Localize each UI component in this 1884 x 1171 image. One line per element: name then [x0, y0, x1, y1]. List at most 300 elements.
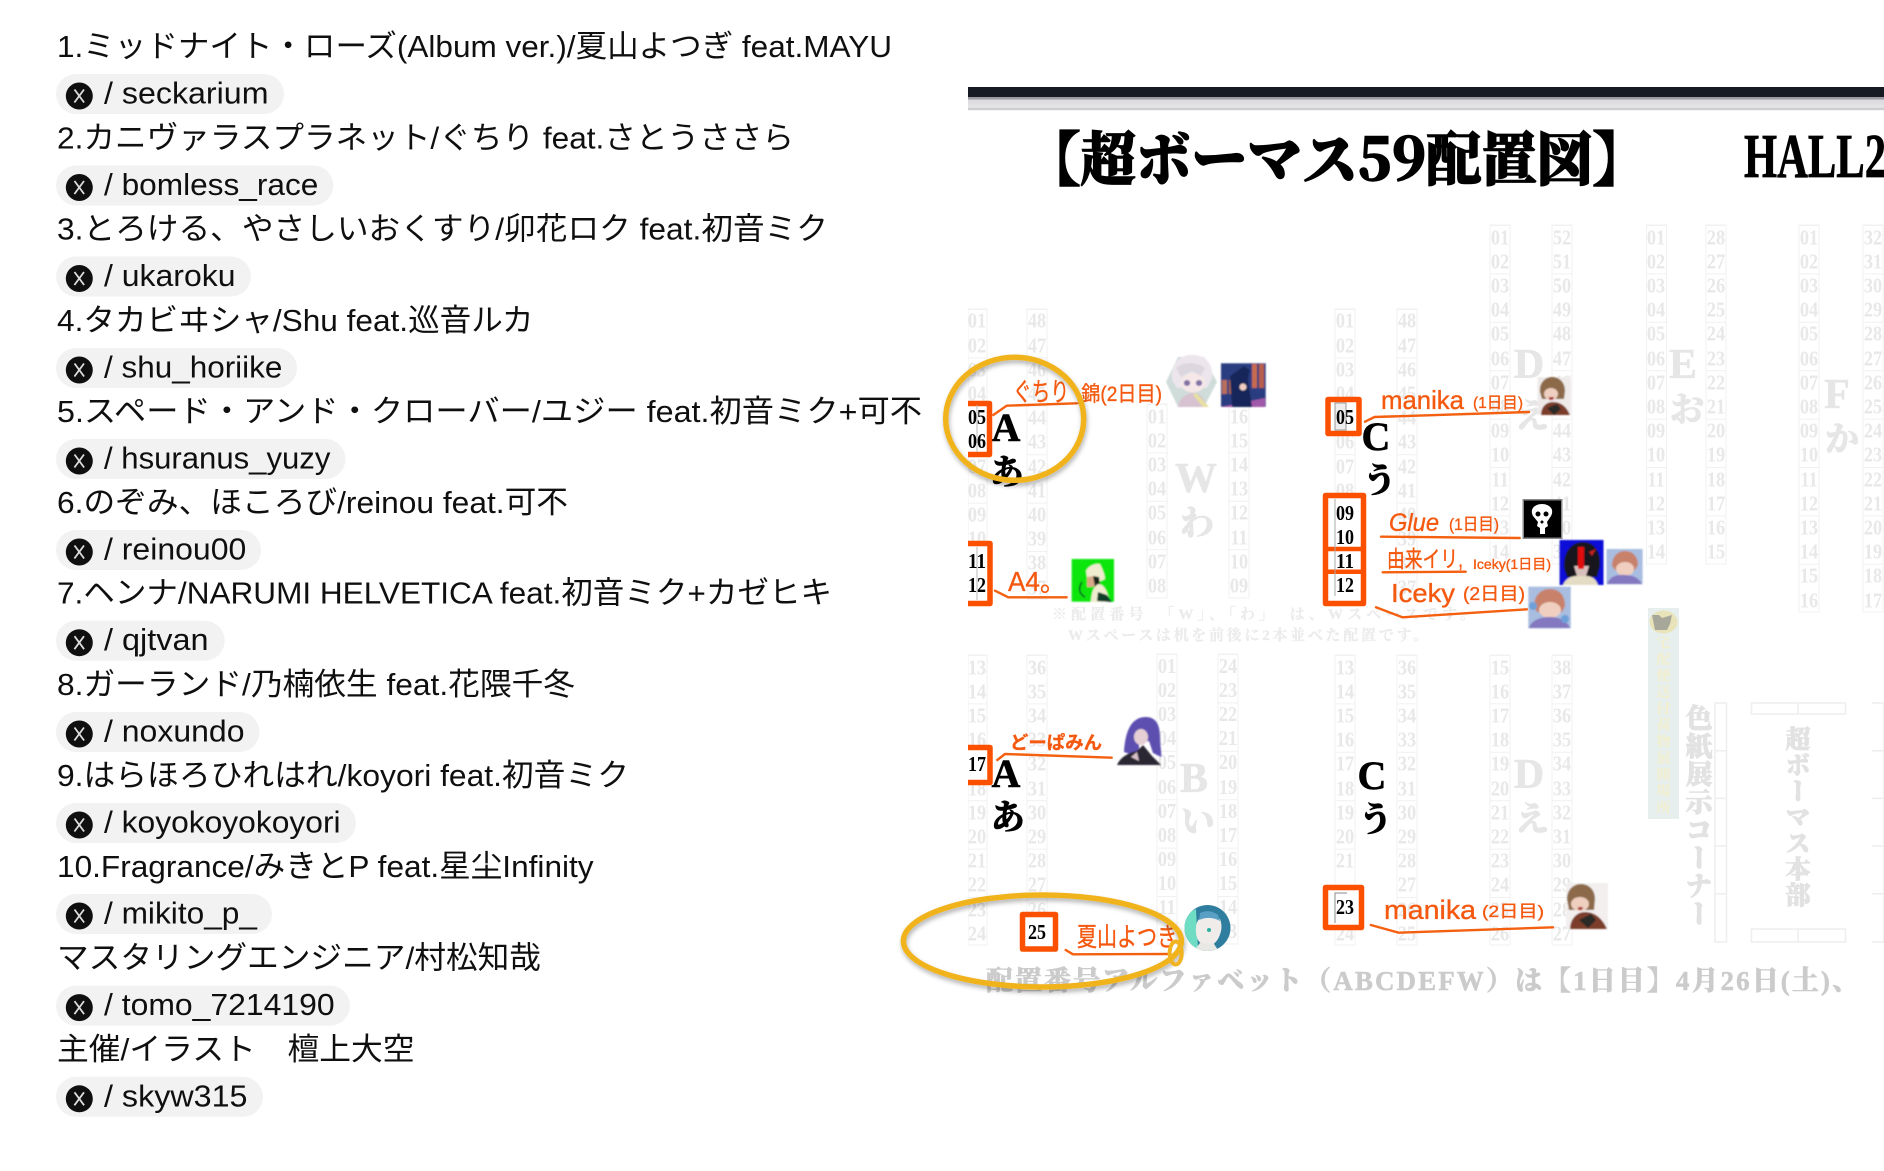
seat numbers: block F: 12 [1800, 492, 1818, 516]
seat numbers: block C upper: 44 [1398, 406, 1416, 430]
credit 4 [56, 303, 534, 388]
delivery strip [1648, 608, 1679, 819]
credit 6 [56, 485, 568, 570]
seat numbers: block D lower: 35 [1553, 728, 1571, 752]
seat numbers: block A lower: 16 [968, 728, 986, 752]
seat numbers: block A lower: 35 [1028, 680, 1046, 704]
seat numbers: block E: 20 [1707, 419, 1725, 443]
seat numbers: block W: 07 [1148, 550, 1166, 574]
credit 9: / koyokoyokoyori [104, 804, 341, 840]
seat numbers: block A lower: 28 [1028, 849, 1046, 873]
credit 7 [56, 576, 832, 661]
credit 3: 3.とろける、やさしいおくすり/卯花ロク feat.初音ミク [57, 212, 828, 246]
seat numbers: block D upper: 01 [1491, 226, 1509, 250]
label: guchiri and nishiki: ぐちり [1013, 377, 1069, 407]
seat numbers: block D lower: 18 [1491, 728, 1509, 752]
seat numbers: block B: 03 [1158, 703, 1176, 726]
faint block letters: わ [1180, 506, 1214, 543]
seat numbers: block D upper: 52 [1553, 226, 1571, 250]
seat numbers: block F: 19 [1864, 540, 1882, 564]
seat numbers: block D lower: 16 [1491, 680, 1509, 704]
seat numbers: block A upper: 02 [968, 334, 986, 358]
seat numbers: block D upper: 02 [1491, 250, 1509, 274]
seat numbers: block A upper: 04 [968, 382, 986, 406]
icon: manika avatar day 2 [1566, 883, 1608, 929]
faint block letters: B [1180, 756, 1208, 802]
seat numbers: block A upper: 42 [1028, 455, 1046, 479]
seat numbers: block E [1647, 226, 1725, 564]
black block letters: C [1362, 414, 1390, 459]
highlight: C 05 [1328, 400, 1359, 434]
seat numbers: block F: 07 [1800, 371, 1818, 395]
seat numbers: block D lower: 36 [1553, 704, 1571, 728]
icon: Glue skull [1522, 499, 1562, 539]
credit 2 [56, 120, 794, 206]
seat numbers: block C lower: 26 [1398, 898, 1416, 922]
icon: dopamin avatar [1117, 717, 1161, 765]
highlight: A 11-12 [968, 544, 990, 604]
seat numbers: block C lower: 21 [1336, 849, 1354, 873]
seat numbers: block C upper: 37 [1398, 576, 1416, 600]
seat numbers: block D upper: 07 [1491, 371, 1509, 395]
credit 4: 4.タカビヰシャ/Shu feat.巡音ルカ [57, 303, 534, 338]
seat numbers: block D lower: 23 [1491, 849, 1509, 873]
seat numbers: block D upper: 50 [1553, 274, 1571, 298]
seat numbers: block B: 05 [1158, 751, 1176, 774]
faint block letters: W [1175, 456, 1217, 502]
seat numbers: block E: 02 [1647, 250, 1665, 274]
seat numbers: block D upper: 46 [1553, 371, 1571, 395]
seat numbers: block A lower: 22 [968, 873, 986, 897]
label: guchiri and nishiki: ,錦(2日目) [1076, 383, 1162, 406]
seat numbers: block C upper: 42 [1398, 455, 1416, 479]
seat numbers: block F: 30 [1864, 274, 1882, 298]
seat numbers: block C upper: 41 [1398, 479, 1416, 503]
seat numbers: block F: 32 [1864, 226, 1882, 250]
seat numbers: block D lower: 31 [1553, 825, 1571, 849]
seat table outlines [968, 225, 1883, 945]
seat numbers: block A upper: 39 [1028, 527, 1046, 551]
seat numbers: block F: 05 [1800, 322, 1818, 346]
credit 4: / shu_horiike [104, 350, 282, 384]
seat numbers: block F: 10 [1800, 443, 1818, 467]
label: manika day 2 [1371, 895, 1553, 933]
seat numbers: block F: 21 [1864, 492, 1882, 516]
label: iceky day 2: Iceky [1391, 578, 1455, 608]
highlight: C 23: 23 [1336, 895, 1354, 919]
seat numbers: block C lower: 31 [1398, 777, 1416, 801]
seat numbers: block D lower: 20 [1491, 777, 1509, 801]
highlight: A 17 [968, 748, 990, 782]
seat numbers: block C upper: 03 [1336, 358, 1354, 382]
seat numbers: block E: 25 [1707, 298, 1725, 322]
seat numbers: block C lower: 19 [1336, 801, 1354, 825]
seat numbers: block C upper: 01 [1336, 309, 1354, 333]
seat numbers: block B: 17 [1219, 824, 1237, 847]
seat numbers: block D upper: 48 [1553, 322, 1571, 346]
seat numbers: block A upper: 38 [1028, 551, 1046, 575]
highlight: C 09-12 [1326, 496, 1364, 604]
panel: credits list [56, 29, 922, 1117]
seat numbers: block A lower: 30 [1028, 801, 1046, 825]
faint block letters: い [1181, 804, 1215, 841]
highlight: A 11-12: 11 [968, 549, 986, 573]
seat numbers: block C lower: 29 [1398, 825, 1416, 849]
seat numbers: block A upper: 07 [968, 455, 986, 479]
seat numbers: block A upper: 03 [968, 358, 986, 382]
corner: shikishi display: 色紙展示コーナー [1680, 704, 1718, 928]
seat numbers: block E: 01 [1647, 226, 1665, 250]
seat numbers: block C lower: 15 [1336, 704, 1354, 728]
highlight: A 25 [1022, 914, 1056, 949]
seat numbers: block C upper: 06 [1336, 430, 1354, 454]
seat numbers: block D upper: 41 [1553, 492, 1571, 516]
bottom caption: 配置番号アルファベット（ABCDEFW）は【1日目】4月26日(土)、 [986, 965, 1859, 996]
panel: floor map [903, 87, 1884, 996]
highlight: A 05-06 [968, 404, 990, 454]
seat numbers: block A upper: 41 [1028, 479, 1046, 503]
seat numbers: block W: 16 [1230, 405, 1248, 429]
seat numbers: block B: 22 [1219, 703, 1237, 726]
seat numbers: block A lower: 31 [1028, 777, 1046, 801]
faint block letters: え [1515, 398, 1549, 436]
seat numbers: block D upper: 49 [1553, 298, 1571, 322]
label: yukiiri and iceky day 1 [1383, 546, 1551, 572]
seat numbers: block D upper: 40 [1553, 516, 1571, 540]
seat numbers: block F: 15 [1800, 564, 1818, 588]
seat numbers: block C upper: 46 [1398, 358, 1416, 382]
faint block letters [1175, 342, 1859, 841]
note: W space: Wスペースは机を前後に2本並べた配置です。 [1068, 626, 1428, 644]
seat numbers: block D upper: 11 [1491, 468, 1509, 492]
seat numbers: block D upper: 39 [1553, 540, 1571, 564]
credit 1 [56, 29, 892, 114]
icon: iceky avatar small [1606, 549, 1643, 584]
seat numbers: block F: 13 [1800, 516, 1818, 540]
seat numbers: block A lower: 23 [968, 898, 986, 922]
seat numbers: block A upper: 44 [1028, 406, 1046, 430]
seat numbers: block C lower: 24 [1336, 922, 1354, 946]
icon: yukiiri avatar [1560, 540, 1604, 585]
seat numbers: block B: 14 [1219, 896, 1237, 919]
seat numbers: block C lower: 17 [1336, 752, 1354, 776]
credit 3: / ukaroku [104, 258, 236, 293]
credit 1: / seckarium [104, 76, 268, 110]
seat numbers: block C lower: 30 [1398, 801, 1416, 825]
seat numbers: block B: 04 [1158, 727, 1176, 750]
seat numbers: block E: 13 [1647, 516, 1665, 540]
seat numbers: block F: 31 [1864, 250, 1882, 274]
seat numbers: block W: 06 [1148, 526, 1166, 550]
seat numbers: block C lower: 33 [1398, 728, 1416, 752]
seat numbers: block B: 24 [1219, 655, 1237, 678]
seat numbers: block E: 07 [1647, 371, 1665, 395]
seat numbers: block F: 23 [1864, 443, 1882, 467]
icon: iceky avatar large [1528, 587, 1571, 628]
seat numbers: block B: 10 [1158, 872, 1176, 895]
seat numbers: block F: 17 [1864, 589, 1882, 613]
black block letters: う [1359, 802, 1393, 839]
seat numbers: block D upper: 05 [1491, 322, 1509, 346]
highlight ring: A 25 [903, 895, 1181, 987]
seat numbers: block B: 11 [1158, 896, 1176, 919]
seat numbers: block D lower: 37 [1553, 680, 1571, 704]
label: manika day 1 [1365, 385, 1529, 422]
label: Glue day 1: Glue [1389, 509, 1439, 537]
seat numbers: block W: 13 [1230, 477, 1248, 501]
credit 2: / bomless_race [104, 167, 318, 202]
credit 7: / qjtvan [104, 622, 208, 657]
credit 9 [56, 758, 629, 843]
seat numbers: block F: 01 [1800, 226, 1818, 250]
seat numbers: block D upper: 47 [1553, 347, 1571, 371]
seat numbers: block C lower: 20 [1336, 825, 1354, 849]
seat numbers: block D upper: 09 [1491, 419, 1509, 443]
seat numbers: block F [1800, 226, 1882, 613]
credit 5: / hsuranus_yuzy [104, 440, 331, 476]
label: manika day 2: manika [1384, 895, 1477, 925]
seat numbers: block E: 21 [1707, 395, 1725, 419]
seat numbers: block D upper: 44 [1553, 419, 1571, 443]
seat numbers: block D lower: 27 [1553, 922, 1571, 946]
seat numbers: block E: 09 [1647, 419, 1665, 443]
faint block letters: D [1514, 342, 1544, 388]
seat numbers: block W: 12 [1230, 501, 1248, 525]
seat numbers: block F: 11 [1800, 468, 1818, 492]
seat numbers: block A upper: 08 [968, 479, 986, 503]
faint block letters: え [1515, 801, 1549, 839]
seat numbers: block D lower [1491, 656, 1571, 946]
credit 8: / noxundo [104, 714, 244, 748]
seat numbers: block C upper: 07 [1336, 455, 1354, 479]
seat numbers: block C upper: 47 [1398, 334, 1416, 358]
seat numbers: block E: 17 [1707, 492, 1725, 516]
black block letters: A [992, 405, 1021, 450]
headquarters: 超ボーマス本部 [1780, 726, 1816, 908]
seat numbers: block B: 13 [1219, 920, 1237, 943]
seat numbers: block D upper: 08 [1491, 395, 1509, 419]
seat numbers: block B: 16 [1219, 848, 1237, 871]
seat numbers: block D lower: 26 [1491, 922, 1509, 946]
seat numbers: block A lower: 24 [968, 922, 986, 946]
seat numbers: block E: 05 [1647, 322, 1665, 346]
seat numbers: block C upper: 08 [1336, 479, 1354, 503]
credit 8: 8.ガーランド/乃楠依生 feat.花隈千冬 [57, 667, 575, 702]
seat numbers: block F: 14 [1800, 540, 1818, 564]
credit 3 [56, 212, 828, 296]
seat numbers: block W: 11 [1230, 526, 1248, 550]
label: manika day 2: (2日目) [1482, 902, 1544, 921]
seat numbers: block A lower: 13 [968, 656, 986, 680]
label: Glue day 1: (1日目) [1449, 515, 1499, 534]
black block letters: あ [991, 800, 1025, 837]
credit: organizer and illustration [56, 1032, 414, 1117]
seat numbers: block F: 03 [1800, 274, 1818, 298]
seat numbers: block D upper: 12 [1491, 492, 1509, 516]
seat numbers: block D upper: 10 [1491, 443, 1509, 467]
seat numbers: block D upper: 42 [1553, 468, 1571, 492]
seat numbers: block B: 09 [1158, 848, 1176, 871]
seat numbers: block B: 21 [1219, 727, 1237, 750]
seat numbers: block C upper: 40 [1398, 503, 1416, 527]
icon: manika avatar day 1 [1538, 377, 1571, 415]
seat numbers: block D upper: 03 [1491, 274, 1509, 298]
label: dopamin: どーぱみん [1010, 732, 1102, 753]
seat numbers: block A upper: 40 [1028, 503, 1046, 527]
seat numbers: block F: 25 [1864, 395, 1882, 419]
seat numbers: block F: 18 [1864, 564, 1882, 588]
seat numbers: block D upper [1491, 226, 1571, 564]
seat numbers: block B: 01 [1158, 655, 1176, 678]
seat numbers: block C lower: 25 [1398, 922, 1416, 946]
seat numbers: block B: 18 [1219, 800, 1237, 823]
note: W space: ※配置番号 「W」、「わ」 は、Wスペースです。 [1052, 605, 1475, 623]
label: natsuyama yotsugi: 夏山よつき [1077, 922, 1177, 952]
label: natsuyama yotsugi [1066, 922, 1177, 954]
seat numbers: block W: 02 [1148, 429, 1166, 453]
seat numbers: block D upper: 45 [1553, 395, 1571, 419]
seat numbers: block F: 24 [1864, 419, 1882, 443]
seat numbers: block A upper: 46 [1028, 358, 1046, 382]
icon: A4 avatar [1072, 559, 1114, 602]
seat numbers: block F: 26 [1864, 371, 1882, 395]
seat numbers: block A lower: 33 [1028, 728, 1046, 752]
seat numbers: block C upper: 48 [1398, 309, 1416, 333]
seat numbers: block E: 11 [1647, 468, 1665, 492]
label: manika day 1: manika [1381, 385, 1465, 415]
seat numbers: block F: 06 [1800, 347, 1818, 371]
seat numbers: block D lower: 34 [1553, 752, 1571, 776]
seat numbers: block D lower: 29 [1553, 873, 1571, 897]
seat numbers: block B: 15 [1219, 872, 1237, 895]
highlight: C 23 [1326, 888, 1362, 928]
seat numbers: block C upper: 04 [1336, 382, 1354, 406]
seat numbers: block B: 06 [1158, 776, 1176, 799]
seat numbers: block D upper: 14 [1491, 540, 1509, 564]
seat numbers: block D lower: 19 [1491, 752, 1509, 776]
seat numbers: block E: 18 [1707, 468, 1725, 492]
highlight ring: A 05-06 [946, 357, 1084, 480]
seat numbers: block A lower: 26 [1028, 898, 1046, 922]
seat numbers: block E: 16 [1707, 516, 1725, 540]
credit 7: 7.ヘンナ/NARUMI HELVETICA feat.初音ミク+カゼヒキ [57, 576, 832, 611]
seat numbers: block A lower: 27 [1028, 873, 1046, 897]
faint block letters: E [1669, 342, 1697, 388]
seat numbers: block A lower: 29 [1028, 825, 1046, 849]
seat numbers: block A upper: 01 [968, 309, 986, 333]
credit: mastering engineer: マスタリングエンジニア/村松知哉 [57, 941, 541, 976]
black block letters: あ [990, 455, 1024, 492]
label: iceky day 2 [1376, 578, 1527, 617]
seat numbers: block F: 20 [1864, 516, 1882, 540]
seat numbers: block A upper: 43 [1028, 430, 1046, 454]
seat numbers: block A lower: 18 [968, 777, 986, 801]
seat numbers: block D lower: 17 [1491, 704, 1509, 728]
highlight: C 05: 05 [1336, 405, 1354, 429]
seat numbers: block E: 22 [1707, 371, 1725, 395]
credit 6: / reinou00 [104, 532, 246, 566]
seat numbers: block F: 02 [1800, 250, 1818, 274]
seat numbers: block E: 10 [1647, 443, 1665, 467]
seat numbers: block B: 08 [1158, 824, 1176, 847]
seat numbers: block D lower: 24 [1491, 873, 1509, 897]
highlight: A 05-06: 06 [968, 429, 986, 453]
seat numbers: block A lower: 32 [1028, 752, 1046, 776]
seat numbers: block E: 08 [1647, 395, 1665, 419]
seat numbers: block C upper: 39 [1398, 527, 1416, 551]
credit: organizer and illustration: / skyw315 [104, 1078, 248, 1113]
seat numbers: block C upper: 38 [1398, 551, 1416, 575]
seat numbers: block W: 05 [1148, 501, 1166, 525]
seat numbers: block E: 04 [1647, 298, 1665, 322]
seat numbers: block A lower: 19 [968, 801, 986, 825]
seat numbers: block C lower: 28 [1398, 849, 1416, 873]
seat numbers: block D upper: 04 [1491, 298, 1509, 322]
seat numbers: block W: 14 [1230, 453, 1248, 477]
seat numbers: block A lower: 14 [968, 680, 986, 704]
seat numbers: block F: 27 [1864, 347, 1882, 371]
seat numbers: block E: 26 [1707, 274, 1725, 298]
seat numbers: block A upper [968, 309, 1046, 600]
seat numbers: block F: 16 [1800, 589, 1818, 613]
seat numbers: block D lower: 33 [1553, 777, 1571, 801]
seat numbers: block D lower: 30 [1553, 849, 1571, 873]
seat numbers: block A upper: 37 [1028, 576, 1046, 600]
seat numbers: block A upper: 48 [1028, 309, 1046, 333]
highlight: A 05-06: 05 [968, 405, 986, 429]
credit 5 [56, 394, 922, 479]
seat numbers: block C lower [1336, 656, 1416, 946]
black block letters: C [1358, 753, 1386, 798]
faint block letters: お [1670, 392, 1704, 429]
seat numbers: block D lower: 22 [1491, 825, 1509, 849]
highlight: C 09-12: 09 [1336, 501, 1354, 525]
label: yukiiri and iceky day 1: 由来イリ, [1387, 546, 1463, 572]
seat numbers: block A upper: 10 [968, 527, 986, 551]
label: manika day 1: (1日目) [1473, 395, 1523, 412]
seat numbers: block E: 24 [1707, 322, 1725, 346]
seat numbers: block C lower: 34 [1398, 704, 1416, 728]
seat numbers: block B: 23 [1219, 679, 1237, 702]
faint block letters: F [1824, 372, 1850, 418]
highlight: C 09-12: 10 [1336, 525, 1354, 549]
seat numbers: block F: 28 [1864, 322, 1882, 346]
seat numbers: block C upper: 02 [1336, 334, 1354, 358]
seat numbers: block C lower: 13 [1336, 656, 1354, 680]
credit 10: 10.Fragrance/みきとP feat.星尘Infinity [57, 849, 594, 884]
seat numbers: block D lower: 38 [1553, 656, 1571, 680]
seat numbers: block W: 01 [1148, 405, 1166, 429]
black block letters [990, 405, 1397, 839]
delivery strip: 宅配便送付荷物展開場所 [1654, 634, 1674, 816]
seat numbers: block D upper: 43 [1553, 443, 1571, 467]
header bars [968, 87, 1884, 110]
seat numbers: block B: 20 [1219, 751, 1237, 774]
seat numbers: block B: 07 [1158, 800, 1176, 823]
faint block letters: か [1825, 422, 1859, 459]
black block letters: う [1363, 463, 1397, 500]
label: guchiri and nishiki [993, 377, 1162, 415]
seat numbers: block B [1158, 655, 1237, 943]
credit 2: 2.カニヴァラスプラネット/ぐちり feat.さとうささら [57, 120, 794, 156]
seat numbers: block E: 12 [1647, 492, 1665, 516]
highlight: C 09-12: 12 [1336, 573, 1354, 597]
seat numbers: block F: 29 [1864, 298, 1882, 322]
credit 8 [56, 667, 575, 752]
seat numbers: block C lower: 18 [1336, 777, 1354, 801]
seat numbers: block A lower: 36 [1028, 656, 1046, 680]
seat numbers: block A lower: 34 [1028, 704, 1046, 728]
